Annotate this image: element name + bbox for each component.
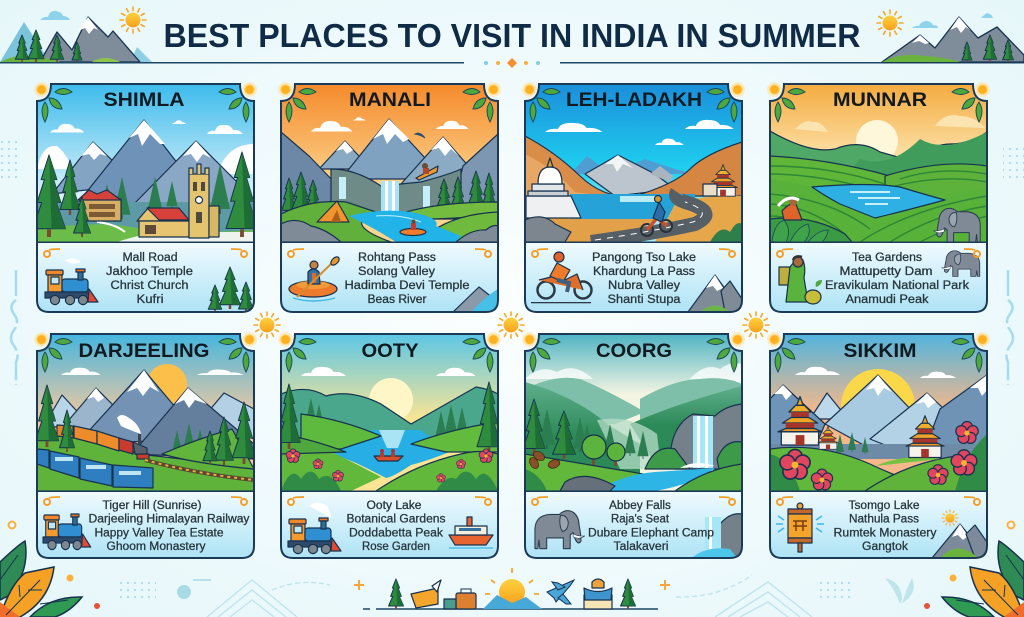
- places list: Khardung La Pass: [593, 266, 695, 278]
- places list: Rose Garden: [362, 541, 430, 553]
- places list: Abbey Falls: [609, 500, 671, 512]
- places list: [834, 500, 937, 553]
- sprout: [885, 578, 914, 604]
- lake: [812, 184, 945, 218]
- places list: [825, 252, 969, 306]
- panel: Coorg: [522, 332, 745, 558]
- places list: Eravikulam National Park: [825, 280, 969, 292]
- places list: [88, 500, 250, 553]
- places list: Hadimba Devi Temple: [344, 280, 470, 292]
- panel: Shimla: [32, 82, 258, 312]
- icon: temple: [584, 579, 612, 609]
- decorative rings and dots: [8, 522, 1014, 609]
- icon: sun over mountain: [483, 568, 542, 609]
- panel: Leh-Ladakh: [522, 82, 745, 312]
- tent: [317, 201, 349, 222]
- places list: Christ Church: [110, 280, 188, 292]
- places list: Pangong Tso Lake: [592, 252, 696, 264]
- places list: [592, 252, 696, 306]
- wavy side ribbons: [11, 270, 1013, 385]
- icon: toy train: [43, 514, 91, 550]
- icon: boat: [449, 517, 493, 548]
- places list: Darjeeling Himalayan Railway: [88, 514, 250, 526]
- places list: Mattupetty Dam: [840, 266, 932, 278]
- sun top left: [120, 7, 146, 33]
- places list: [346, 500, 446, 553]
- winding road: [591, 192, 705, 242]
- lake: [334, 430, 448, 478]
- places list: Solang Valley: [358, 266, 435, 278]
- waterfall: [693, 416, 713, 468]
- coffee beans: [529, 451, 560, 469]
- places list: Ooty Lake: [366, 500, 422, 512]
- tea bushes: [772, 220, 828, 242]
- icon: mountain: [688, 275, 742, 312]
- building: colonial house: [78, 190, 121, 221]
- card frame: [525, 84, 742, 312]
- places list: Botanical Gardens: [346, 514, 446, 526]
- icon: kayak raft: [289, 255, 341, 301]
- panel: Darjeeling: [34, 332, 257, 558]
- card frame: [281, 334, 498, 558]
- icon: motorcycle rider: [531, 252, 592, 303]
- panel: Munnar: [767, 82, 990, 312]
- heading: DARJEELING: [78, 340, 210, 362]
- card frame: [770, 334, 987, 558]
- round trees: [582, 435, 625, 468]
- places list: Gangtok: [862, 541, 908, 553]
- places list: Nathula Pass: [849, 514, 919, 526]
- leaves bottom left: [0, 541, 82, 617]
- elephant: [933, 208, 980, 242]
- icon: small mountain: [453, 287, 498, 312]
- red flowers: [286, 449, 493, 482]
- places list: Tea Gardens: [852, 252, 922, 264]
- motorcycle rider: [641, 196, 672, 236]
- flowers: [780, 422, 978, 490]
- header mountains left: [0, 11, 152, 62]
- card frame: [770, 84, 987, 312]
- panel: Ooty: [278, 332, 501, 558]
- heading: OOTY: [362, 340, 418, 362]
- panel: Manali: [278, 82, 501, 312]
- icon: map: [411, 580, 441, 608]
- smoke: [117, 415, 141, 434]
- title rule: [0, 58, 1024, 68]
- places list: Nubra Valley: [608, 280, 680, 292]
- icon: toy train: [288, 502, 341, 554]
- heading: LEH-LADAKH: [566, 89, 702, 111]
- heading: SHIMLA: [104, 89, 184, 111]
- places list: Raja's Seat: [611, 514, 670, 526]
- leaves bottom right: [942, 541, 1024, 617]
- icon: tea picker woman: [779, 256, 822, 304]
- faint chevrons: [207, 575, 812, 617]
- sun top right: [877, 10, 903, 36]
- blue train: [37, 449, 153, 488]
- places list: Anamudi Peak: [846, 294, 929, 306]
- places list: Ghoom Monastery: [106, 541, 206, 553]
- monastery: [703, 165, 737, 196]
- places list: Mall Road: [122, 252, 178, 264]
- bottom travel strip: [363, 568, 658, 609]
- icon: mountain with sun: [932, 510, 987, 558]
- heading: MUNNAR: [833, 89, 927, 111]
- stupa: [526, 158, 581, 218]
- raft: [400, 220, 426, 236]
- icon: suitcase: [444, 589, 476, 609]
- tea picker: [778, 198, 802, 220]
- title: BEST PLACES TO VISIT IN INDIA IN SUMMER: [164, 17, 861, 54]
- places list: Rohtang Pass: [358, 252, 436, 264]
- places list: Shanti Stupa: [608, 294, 681, 306]
- panel: Sikkim: [767, 332, 990, 558]
- icon: pine trees: [208, 267, 254, 312]
- icon: airplane: [547, 580, 574, 604]
- places list: Kufri: [136, 294, 164, 306]
- places list: [106, 252, 193, 306]
- icon: tree right: [620, 579, 636, 609]
- places list: [344, 252, 470, 306]
- building: Christ Church: [137, 164, 219, 238]
- heading: COORG: [596, 340, 672, 362]
- decorative dot clusters: [0, 140, 1024, 601]
- card frame: [37, 334, 254, 558]
- card frame: [37, 84, 254, 312]
- icon: waterfall: [692, 514, 742, 558]
- kayaker jump: [416, 163, 438, 180]
- places list: [588, 500, 714, 553]
- heading: SIKKIM: [844, 340, 916, 362]
- places list: Happy Valley Tea Estate: [94, 527, 224, 539]
- places list: Doddabetta Peak: [349, 527, 443, 539]
- icon: elephant: [535, 511, 585, 549]
- heading: MANALI: [349, 89, 431, 111]
- places list: Beas River: [368, 294, 427, 306]
- railway track: [145, 460, 254, 480]
- icon: toy train: [45, 258, 98, 305]
- rocks: [670, 404, 742, 469]
- places list: Tiger Hill (Sunrise): [102, 500, 202, 512]
- places list: Dubare Elephant Camp: [588, 527, 714, 539]
- icon: elephant: [942, 251, 980, 276]
- icon: tree left: [388, 579, 404, 609]
- places list: Tsomgo Lake: [848, 500, 920, 512]
- places list: Rumtek Monastery: [834, 527, 937, 539]
- boat: [374, 449, 403, 461]
- suns between rows: [254, 312, 769, 338]
- places list: Jakhoo Temple: [106, 266, 193, 278]
- icon: prayer wheel: [776, 503, 824, 552]
- places list: Talakaveri: [614, 541, 668, 553]
- orange carriages: [57, 425, 149, 459]
- card frame: [525, 334, 742, 558]
- header mountains right: [882, 13, 1024, 62]
- monasteries: [778, 397, 944, 458]
- card frame: [281, 84, 498, 312]
